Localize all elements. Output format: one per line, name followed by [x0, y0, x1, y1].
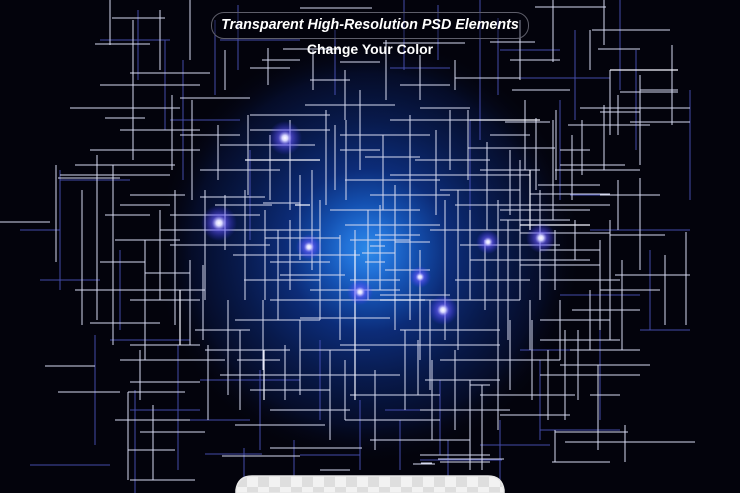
title pill	[211, 12, 529, 39]
bottom checkerboard panel	[236, 476, 504, 493]
right	[530, 70, 690, 365]
subtitle: Change Your Color	[307, 41, 433, 57]
bright highlight lines	[180, 70, 678, 400]
central	[205, 120, 622, 400]
title pill: Transparent High-Resolution PSD Elements	[221, 17, 519, 33]
lower	[128, 300, 625, 480]
light flares	[201, 121, 556, 325]
upper field	[110, 0, 672, 165]
left	[0, 118, 250, 360]
upper middle	[133, 75, 618, 230]
